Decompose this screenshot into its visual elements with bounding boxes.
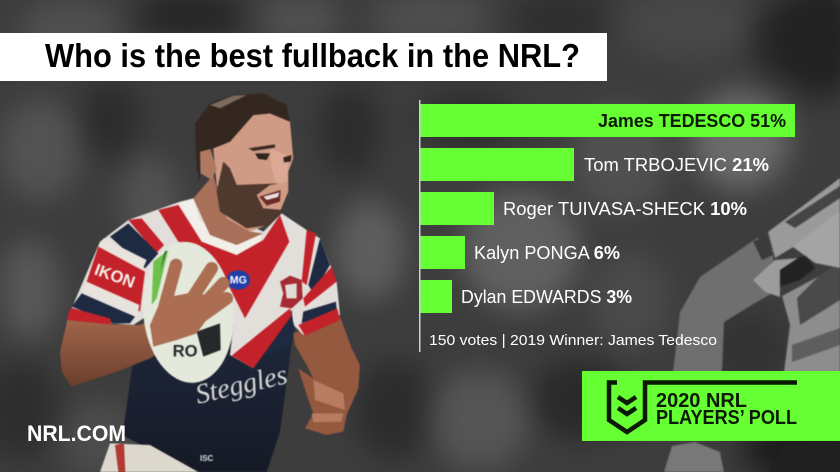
head: [213, 113, 293, 232]
jersey shoulders and chest: [67, 198, 340, 368]
player: James Tedesco: Steggles: [192, 359, 290, 411]
player: James Tedesco: [60, 93, 360, 472]
jersey lower body: [122, 265, 303, 472]
bar: James Tedesco: [420, 104, 795, 137]
bar chart: poll results: [419, 100, 795, 352]
bar: Tom Trbojevic: [420, 148, 769, 181]
bar: Kalyn Ponga: Kalyn PONGA 6%: [474, 243, 620, 263]
jersey badge and sponsor: [227, 270, 250, 290]
opposing player's arm and jersey: [664, 178, 840, 472]
ball: [137, 238, 239, 387]
title bar: Who is the best fullback in the NRL?: [45, 37, 580, 74]
player: James Tedesco: ISC: [200, 454, 214, 463]
wrist band: [753, 238, 773, 260]
hair: [195, 93, 290, 182]
bar: Dylan Edwards: [420, 280, 632, 313]
bar: Tom Trbojevic: Tom TRBOJEVIC 21%: [584, 155, 769, 175]
jersey: [782, 265, 840, 372]
bar: Roger Tuivasa-Sheck: Roger TUIVASA-SHECK 10%: [503, 199, 747, 219]
bar: Roger Tuivasa-Sheck: [420, 192, 747, 225]
icon: shield chevrons: [618, 397, 636, 414]
badge: 2020 NRL Players' Poll: 2020 NRL: [656, 390, 747, 412]
lower fist: [664, 442, 724, 472]
hand on ball: [165, 265, 227, 315]
bar: James Tedesco: James TEDESCO 51%: [598, 111, 786, 131]
player: James Tedesco: RO: [173, 342, 198, 361]
player: James Tedesco: MG: [230, 275, 247, 287]
forearm: [793, 210, 840, 268]
badge: 2020 NRL Players' Poll: PLAYERS’ POLL: [656, 407, 797, 429]
bar: Dylan Edwards: Dylan EDWARDS 3%: [461, 287, 632, 307]
badge: 2020 NRL Players' Poll: [582, 371, 840, 441]
right arm and hand: [293, 317, 360, 435]
ear: [200, 148, 217, 180]
beard: [217, 162, 283, 228]
icon: NRL shield: [609, 382, 797, 432]
upper arm: [673, 238, 778, 372]
NRL.COM logo: NRL.COM: [27, 421, 126, 446]
footnote: votes and previous winner: 150 votes | 2019 Winner: James Tedesco: [429, 333, 717, 349]
neck: [193, 175, 263, 245]
bar: Kalyn Ponga: [420, 236, 620, 269]
player: James Tedesco: IKON: [92, 260, 138, 292]
dark wrap and fist: [778, 256, 815, 287]
eyes and brows: [248, 144, 275, 151]
sleeve: [768, 178, 840, 258]
left arm: [60, 315, 183, 387]
